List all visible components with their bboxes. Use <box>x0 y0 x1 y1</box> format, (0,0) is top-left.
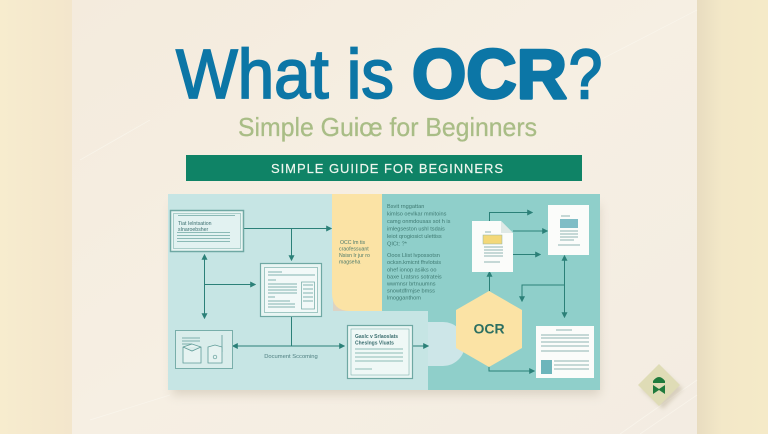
text block: OCR description: kimlso oevlkar mmitoins <box>387 212 447 218</box>
text block: OCR description: baxe Lratsns sotrateis <box>387 274 442 280</box>
panel: yellow note: Nsisn Ir jur ro <box>339 253 370 259</box>
caption: document scanning: Document Sccoming <box>264 354 318 360</box>
text block: OCR description: lmogganthom <box>387 296 421 302</box>
title: What is <box>176 35 394 113</box>
document 1 <box>170 210 244 252</box>
document B <box>548 205 589 255</box>
document 4: Gaslc v Srlaoslats <box>355 334 398 340</box>
document C <box>536 326 594 378</box>
banner: SIMPLE GUIIDE FOR BEGINNERS <box>271 161 503 176</box>
document 1: Tiat Ielntsation <box>178 221 212 227</box>
icon: box left <box>183 344 201 363</box>
document A with fold <box>472 221 513 272</box>
text block: OCR description: ocksn.kmicnt fhvlotsis <box>387 260 441 266</box>
title: ? <box>569 35 602 113</box>
title: OCR <box>412 35 567 113</box>
panel: yellow note: craofessuant <box>339 246 369 252</box>
title <box>176 35 602 113</box>
text block: OCR description: Ooox Llist lvpossotsn <box>387 253 440 259</box>
text block: OCR description: camg onmdousas sot h is <box>387 219 451 225</box>
panel: yellow note <box>332 194 382 311</box>
document 1: sInaroebsher <box>178 227 209 233</box>
shape: pale circle <box>428 322 465 366</box>
panel shadow <box>172 205 600 395</box>
text block: OCR description: wwmnsr brtnuumns <box>386 282 436 288</box>
panel: light teal left section <box>168 194 333 390</box>
icon: box right <box>208 345 222 363</box>
icon: logo diamond <box>638 364 683 409</box>
text block: OCR description: QICt: ?* <box>387 242 408 248</box>
panel: darker teal right section <box>382 194 600 390</box>
panel: OCR workflow diagram <box>168 194 600 390</box>
text block: OCR description: leiot qrogiosict ulettiss <box>387 234 442 240</box>
text block: OCR description: snowtdfrmjse bmss <box>387 288 435 294</box>
text block: OCR description: ohef ionop asiiks oo <box>387 268 436 274</box>
panel: yellow note: OCC lm tis <box>340 240 365 246</box>
document 4 <box>348 326 412 378</box>
banner <box>186 155 582 181</box>
text block: OCR description: Bsvit rnggattan <box>387 204 424 210</box>
panel: yellow note: magseha <box>339 260 360 266</box>
connector arrows left <box>204 228 428 346</box>
panel: lower light section <box>330 311 428 390</box>
hexagon: OCR: OCR <box>473 320 505 336</box>
document 4: Cheslngs Vluats <box>355 340 394 346</box>
subtitle: Simple Guiœ for Beginners <box>238 112 537 142</box>
hexagon: OCR <box>456 291 522 367</box>
document 2 <box>260 264 322 316</box>
document 3 with folders <box>176 330 232 368</box>
connector arrows right <box>489 212 564 371</box>
text block: OCR description: imlegseston ushl tsdais <box>387 226 445 232</box>
